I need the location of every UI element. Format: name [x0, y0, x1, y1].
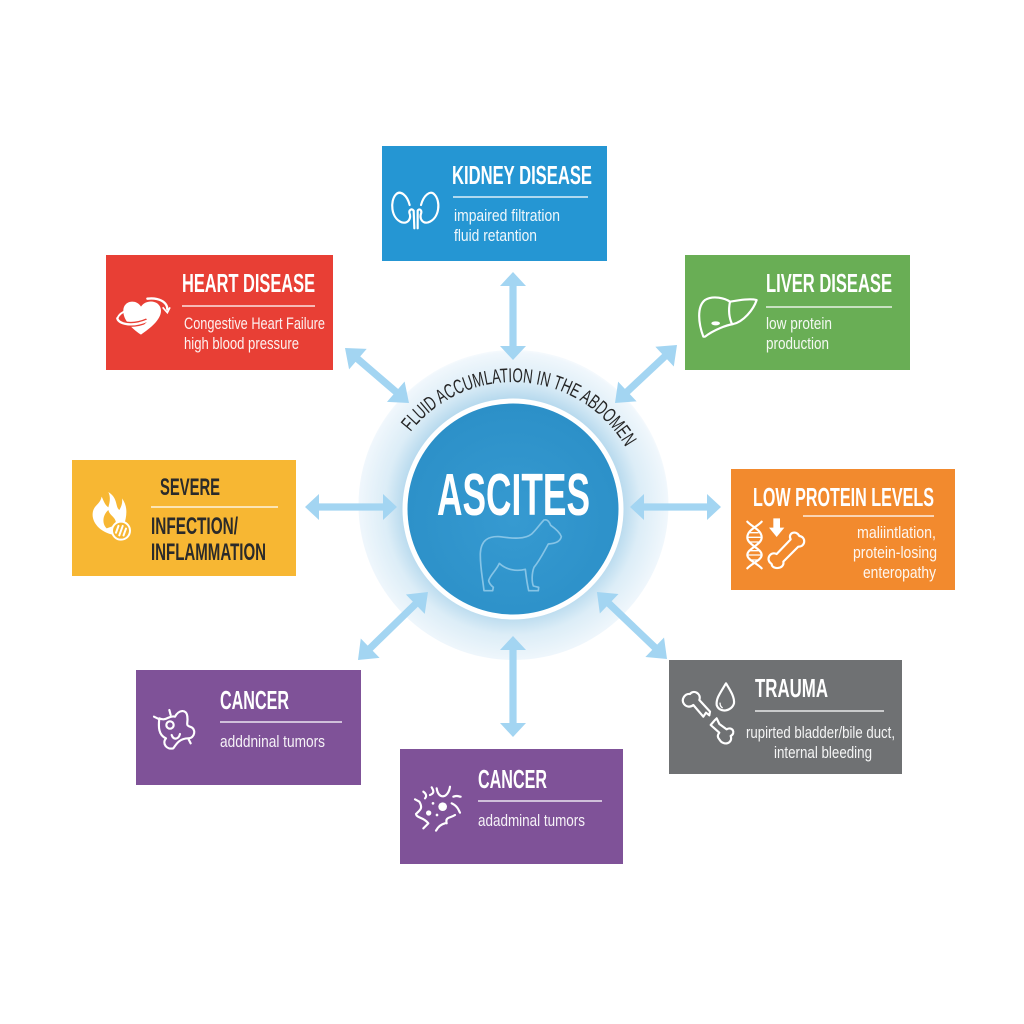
curved caption: FLUID ACCUMLATION IN THE ABDOMEN: [400, 368, 637, 446]
description: [766, 315, 832, 353]
description: fluid retantion: [454, 227, 537, 245]
icon: tumor cell: [154, 710, 194, 749]
arrow: trauma to hub: [588, 582, 676, 669]
panel: kidney disease: [382, 146, 607, 261]
white ring: [402, 398, 624, 620]
panel: cancer left: [136, 670, 361, 785]
arrow: kidney to hub: [500, 272, 526, 360]
icon: cancer cell: [415, 787, 461, 831]
arrow: low protein to hub: [630, 494, 721, 520]
description: [746, 724, 895, 762]
description: rupirted bladder/bile duct,: [746, 724, 895, 742]
description: [151, 513, 266, 566]
description: maliintlation,: [857, 524, 936, 542]
central hub: [358, 350, 668, 660]
arrow: heart to hub: [336, 338, 418, 413]
heading: TRAUMA: [755, 673, 828, 703]
icon: broken bone and drop: [683, 683, 734, 743]
icon: liver: [699, 297, 757, 337]
heading: HEART DISEASE: [182, 268, 315, 298]
panel: liver disease: [685, 255, 910, 370]
blue circle: [408, 404, 618, 614]
description: adadminal tumors: [478, 812, 585, 830]
icon: heart with arrow: [117, 298, 170, 335]
heading: LIVER DISEASE: [766, 268, 892, 298]
icon: flame: [93, 492, 130, 540]
arrow: cancer bottom to hub: [500, 636, 526, 737]
arrow: infection to hub: [305, 494, 397, 520]
description: production: [766, 335, 829, 353]
hub title: ASCITES: [437, 462, 590, 528]
description: protein-losing: [853, 544, 937, 562]
description: internal bleeding: [774, 744, 872, 762]
description: [184, 315, 325, 353]
description: [853, 524, 937, 582]
description: low protein: [766, 315, 832, 333]
heading: SEVERE: [160, 474, 220, 501]
panel: severe infection: [72, 460, 296, 576]
halo: [358, 350, 668, 660]
heading: KIDNEY DISEASE: [452, 160, 592, 190]
heading: CANCER: [220, 685, 289, 715]
icon: kidneys: [392, 193, 438, 228]
description: high blood pressure: [184, 335, 299, 353]
arrow: liver to hub: [606, 335, 686, 413]
panel: trauma: [669, 660, 902, 774]
heading: CANCER: [478, 764, 547, 794]
arrow: cancer left to hub: [349, 582, 437, 670]
description: INFLAMMATION: [151, 539, 266, 566]
description: INFECTION/: [151, 513, 238, 540]
icon: dna and bone: [747, 518, 804, 568]
description: enteropathy: [863, 564, 937, 582]
description: [454, 207, 560, 245]
panel: heart disease: [106, 255, 333, 370]
description: adddninal tumors: [220, 733, 325, 751]
panel: cancer bottom: [400, 749, 623, 864]
icon: dog outline: [480, 520, 561, 591]
panel: low protein levels: [731, 469, 955, 590]
description: impaired filtration: [454, 207, 560, 225]
description: Congestive Heart Failure: [184, 315, 325, 333]
